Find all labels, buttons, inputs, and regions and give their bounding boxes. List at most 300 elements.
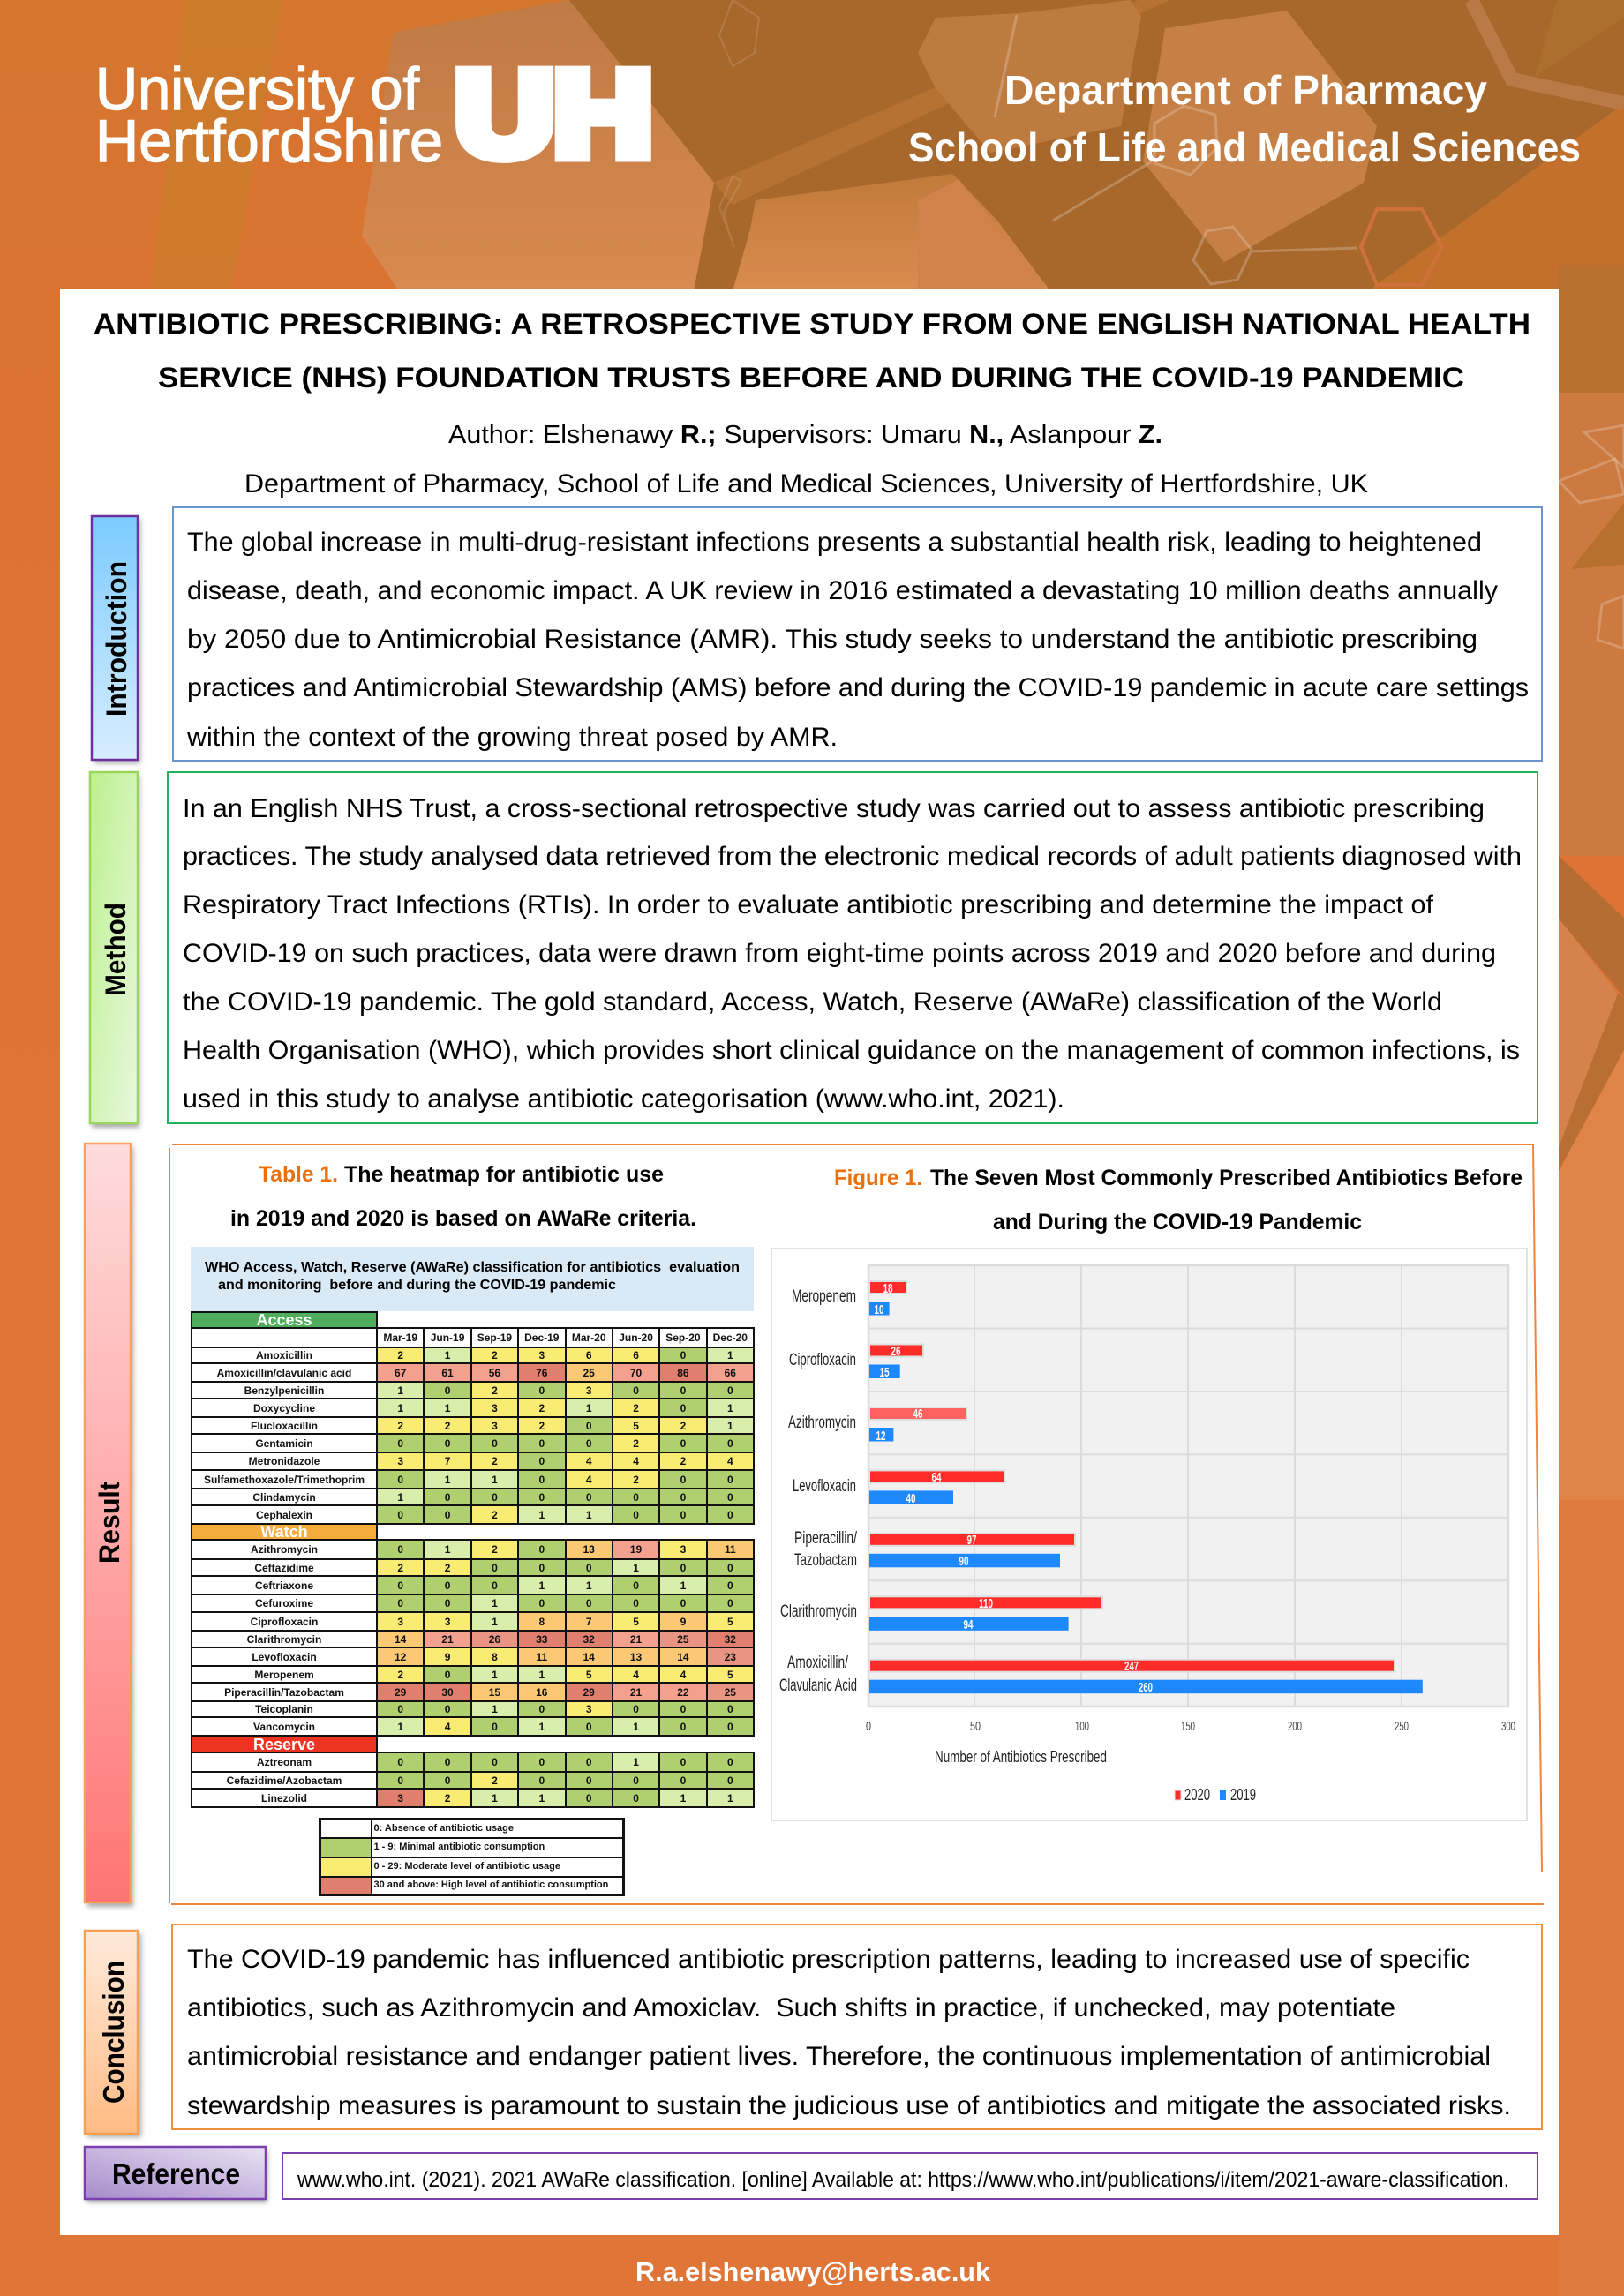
heatmap table: AWaRe antibiotic use: 13: [630, 1650, 642, 1662]
heatmap table: AWaRe antibiotic use: 1: [397, 1384, 403, 1396]
header: department and school: Department of Pharmacy: [1004, 67, 1487, 113]
heatmap table: AWaRe antibiotic use: 0: [445, 1509, 450, 1521]
heatmap legend: 0 - 29: Moderate level of antibiotic usage: [374, 1861, 560, 1872]
heatmap table: AWaRe antibiotic use: 0: [680, 1437, 686, 1449]
heatmap table: AWaRe antibiotic use: 0: [586, 1437, 592, 1449]
heatmap table: AWaRe antibiotic use: 1: [633, 1756, 639, 1768]
panel: conclusion text: stewardship measures is paramount to sustain the judicious use of antibiotics and mitigate the associated risks.: [187, 2091, 1511, 2120]
heatmap table: AWaRe antibiotic use: 0: [586, 1756, 592, 1768]
heatmap table: AWaRe antibiotic use: 0: [397, 1474, 403, 1486]
bar value labels: [874, 1281, 1153, 1695]
title: SERVICE (NHS) FOUNDATION TRUSTS BEFORE AND DURING THE COVID-19 PANDEMIC: [158, 362, 1464, 394]
heatmap table: AWaRe antibiotic use: 0: [492, 1491, 498, 1504]
heatmap table: AWaRe antibiotic use: Cephalexin: [256, 1509, 312, 1521]
section tab: Introduction: [92, 516, 140, 763]
heatmap table: AWaRe antibiotic use: 1: [492, 1791, 498, 1804]
category labels: Clarithromycin: [780, 1602, 857, 1621]
heatmap table: AWaRe antibiotic use: 3: [538, 1349, 545, 1362]
heatmap table: AWaRe antibiotic use: 0: [633, 1597, 639, 1609]
title: ANTIBIOTIC PRESCRIBING: A RETROSPECTIVE STUDY FROM ONE ENGLISH NATIONAL HEALTH: [94, 308, 1530, 340]
heatmap table: AWaRe antibiotic use: 1: [538, 1791, 545, 1804]
heatmap table: AWaRe antibiotic use: 4: [633, 1455, 639, 1467]
heatmap table: AWaRe antibiotic use: Flucloxacillin: [251, 1419, 318, 1431]
heatmap table: AWaRe antibiotic use: 2: [492, 1384, 498, 1396]
heatmap table: AWaRe antibiotic use: 8: [538, 1615, 545, 1627]
heatmap table: AWaRe antibiotic use: 9: [680, 1615, 686, 1627]
heatmap table: AWaRe antibiotic use: Jun-20: [619, 1332, 653, 1344]
heatmap table: AWaRe antibiotic use: 0: [445, 1774, 450, 1786]
heatmap table: AWaRe antibiotic use: 4: [586, 1474, 592, 1486]
panel: conclusion text: The COVID-19 pandemic has influenced antibiotic prescription patterns, leading to increased use of specific: [187, 1945, 1470, 1974]
heatmap table: AWaRe antibiotic use: 3: [397, 1455, 403, 1467]
heatmap table: AWaRe antibiotic use: 0: [538, 1437, 545, 1449]
legend: [1175, 1786, 1256, 1804]
panel: method text: [168, 772, 1538, 1123]
heatmap table: AWaRe antibiotic use: 32: [725, 1632, 736, 1645]
legend: 2020: [1184, 1786, 1210, 1804]
heatmap table: AWaRe antibiotic use: 2: [633, 1437, 639, 1449]
panel: introduction text: by 2050 due to Antimicrobial Resistance (AMR). This study seeks to understand the antibiotic prescribing: [187, 625, 1477, 654]
heatmap table: AWaRe antibiotic use: 0: [397, 1579, 403, 1592]
heatmap table: AWaRe antibiotic use: 0: [445, 1756, 450, 1768]
heatmap table: AWaRe antibiotic use: 70: [630, 1366, 642, 1378]
bar value labels: 64: [932, 1470, 942, 1485]
panel: conclusion text: antimicrobial resistance and endanger patient lives. Therefore, the continuous implementation of antimicrobial: [187, 2042, 1491, 2071]
panel: introduction text: practices and Antimicrobial Stewardship (AMS) before and during the COVID-19 pandemic in acute care settings: [187, 673, 1529, 702]
panel: conclusion text: antibiotics, such as Azithromycin and Amoxiclav. Such shifts in practice, if unchecked, may potentiate: [187, 1993, 1395, 2022]
heatmap table: AWaRe antibiotic use: 0: [586, 1491, 592, 1504]
heatmap table: AWaRe antibiotic use: 0: [445, 1597, 450, 1609]
heatmap table: AWaRe antibiotic use: 0: [633, 1791, 639, 1804]
heatmap table: AWaRe antibiotic use: 1: [727, 1401, 733, 1414]
heatmap table: AWaRe antibiotic use: 0: [680, 1349, 686, 1362]
heatmap table: AWaRe antibiotic use: Piperacillin/Tazobactam: [224, 1685, 344, 1698]
heatmap table: AWaRe antibiotic use: 1: [727, 1791, 733, 1804]
heatmap legend: 1 - 9: Minimal antibiotic consumption: [374, 1842, 545, 1852]
panel: conclusion text: [172, 1925, 1542, 2129]
legend: 2019: [1230, 1786, 1256, 1804]
heatmap table: AWaRe antibiotic use: 5: [633, 1615, 639, 1627]
heatmap table: AWaRe antibiotic use: 3: [445, 1615, 450, 1627]
bar value labels: 260: [1139, 1680, 1153, 1695]
logo: University of Hertfordshire: UH: [455, 48, 652, 180]
heatmap table: AWaRe antibiotic use: 7: [586, 1615, 592, 1627]
heatmap table: AWaRe antibiotic use: 9: [445, 1650, 450, 1662]
heatmap table: AWaRe antibiotic use: 0: [397, 1543, 403, 1556]
heatmap table: AWaRe antibiotic use: 3: [586, 1384, 592, 1396]
heatmap table: AWaRe antibiotic use: 0: [727, 1756, 733, 1768]
bar chart: seven most prescribed antibiotics: [771, 1249, 1527, 1820]
heatmap table: AWaRe antibiotic use: 1: [680, 1579, 686, 1592]
heatmap table: AWaRe antibiotic use: 2: [397, 1668, 403, 1680]
heatmap table: AWaRe antibiotic use: 0: [492, 1579, 498, 1592]
panel: reference text: [282, 2153, 1538, 2199]
heatmap table: AWaRe antibiotic use: 2: [680, 1455, 686, 1467]
heatmap table: AWaRe antibiotic use: 4: [445, 1721, 450, 1733]
axis title: Number of Antibiotics Prescribed: [935, 1748, 1107, 1766]
heatmap table: AWaRe antibiotic use: 0: [492, 1721, 498, 1733]
heatmap table: AWaRe antibiotic use: Teicoplanin: [255, 1703, 313, 1715]
bar value labels: 247: [1124, 1659, 1139, 1674]
heatmap table: AWaRe antibiotic use: 25: [677, 1632, 689, 1645]
heatmap table: AWaRe antibiotic use: 0: [492, 1437, 498, 1449]
heatmap table: AWaRe antibiotic use: 0: [397, 1509, 403, 1521]
section tab: Introduction: Introduction: [101, 561, 132, 717]
bar value labels: 97: [967, 1533, 976, 1548]
panel: introduction text: disease, death, and economic impact. A UK review in 2016 estimated a devastating 10 million deaths annually: [187, 576, 1498, 605]
heatmap table: AWaRe antibiotic use: 1: [492, 1474, 498, 1486]
heatmap table: AWaRe antibiotic use: 0: [397, 1774, 403, 1786]
heatmap table: AWaRe antibiotic use: Levofloxacin: [252, 1650, 317, 1662]
heatmap table: AWaRe antibiotic use: 5: [586, 1668, 592, 1680]
heatmap table: AWaRe antibiotic use: 0: [727, 1721, 733, 1733]
heatmap table: AWaRe antibiotic use: 0: [445, 1579, 450, 1592]
category labels: Ciprofloxacin: [789, 1351, 856, 1369]
heatmap table: AWaRe antibiotic use: Ceftazidime: [254, 1562, 314, 1574]
heatmap table: AWaRe antibiotic use: 0: [727, 1474, 733, 1486]
heatmap table: AWaRe antibiotic use: 23: [725, 1650, 736, 1662]
heatmap table: AWaRe antibiotic use: 14: [583, 1650, 595, 1662]
heatmap table: AWaRe antibiotic use: 5: [727, 1615, 733, 1627]
heatmap table: AWaRe antibiotic use: Clindamycin: [252, 1491, 316, 1504]
heatmap table: AWaRe antibiotic use: 22: [677, 1685, 689, 1698]
heatmap table: AWaRe antibiotic use: 14: [395, 1632, 406, 1645]
contact email: R.a.elshenawy@herts.ac.uk: [635, 2256, 991, 2287]
2020 bars: [869, 1281, 1395, 1672]
heatmap table: AWaRe antibiotic use: 0: [680, 1756, 686, 1768]
heatmap table: AWaRe antibiotic use: 0: [633, 1509, 639, 1521]
heatmap table: AWaRe antibiotic use: 67: [395, 1366, 406, 1378]
heatmap table: AWaRe antibiotic use: 1: [445, 1474, 450, 1486]
heatmap table: AWaRe antibiotic use: Azithromycin: [251, 1543, 318, 1556]
heatmap table: AWaRe antibiotic use: Metronidazole: [249, 1455, 320, 1467]
category labels: Levofloxacin: [793, 1477, 856, 1496]
panel: introduction text: within the context of the growing threat posed by AMR.: [186, 723, 838, 752]
category labels: Tazobactam: [794, 1551, 857, 1570]
panel: method text: Respiratory Tract Infections (RTIs). In order to evaluate antibiotic prescribing and determine the impact of: [183, 890, 1434, 919]
heatmap table: AWaRe antibiotic use: 0: [445, 1668, 450, 1680]
value axis ticks: 150: [1181, 1719, 1195, 1734]
heatmap table: AWaRe antibiotic use: 0: [397, 1597, 403, 1609]
heatmap table: AWaRe antibiotic use: 5: [727, 1668, 733, 1680]
table heading: Table 1.: [259, 1162, 338, 1187]
value axis ticks: 200: [1288, 1719, 1302, 1734]
heatmap table: AWaRe antibiotic use: 0: [538, 1384, 545, 1396]
heatmap legend: 0: Absence of antibiotic usage: [374, 1823, 514, 1834]
bar value labels: 110: [979, 1596, 993, 1611]
heatmap table: AWaRe antibiotic use: 5: [633, 1419, 639, 1431]
heatmap table: AWaRe antibiotic use: 32: [583, 1632, 595, 1645]
panel: result frame: [169, 1144, 1544, 1904]
figure heading: Figure 1.: [834, 1166, 922, 1190]
heatmap table: AWaRe antibiotic use: Ceftriaxone: [255, 1579, 313, 1592]
heatmap table: AWaRe antibiotic use: 2: [633, 1401, 639, 1414]
heatmap table: AWaRe antibiotic use: 2: [397, 1562, 403, 1574]
heatmap table: AWaRe antibiotic use: 0: [727, 1491, 733, 1504]
heatmap table: AWaRe antibiotic use: 3: [397, 1791, 403, 1804]
heatmap table: AWaRe antibiotic use: 0: [727, 1384, 733, 1396]
heatmap table: AWaRe antibiotic use: Mar-19: [383, 1332, 417, 1344]
heatmap table: AWaRe antibiotic use: 16: [536, 1685, 547, 1698]
heatmap table: AWaRe antibiotic use: 6: [586, 1349, 592, 1362]
heatmap table: AWaRe antibiotic use: Aztreonam: [257, 1756, 312, 1768]
heatmap table: AWaRe antibiotic use: Sulfamethoxazole/Trimethoprim: [204, 1474, 365, 1486]
heatmap table: AWaRe antibiotic use: 6: [633, 1349, 639, 1362]
heatmap table: AWaRe antibiotic use: 0: [586, 1562, 592, 1574]
panel: introduction text: [173, 507, 1542, 761]
heatmap table: AWaRe antibiotic use: Clarithromycin: [247, 1632, 321, 1645]
heatmap table: AWaRe antibiotic use: 0: [538, 1774, 545, 1786]
figure heading: [834, 1166, 1522, 1234]
heatmap table: AWaRe antibiotic use: 0: [680, 1509, 686, 1521]
heatmap table: AWaRe antibiotic use: 3: [680, 1543, 686, 1556]
bar value labels: 12: [876, 1429, 886, 1444]
heatmap table: AWaRe antibiotic use: 0: [586, 1774, 592, 1786]
heatmap table: AWaRe antibiotic use: 1: [586, 1509, 592, 1521]
heatmap table: AWaRe antibiotic use: 0: [680, 1474, 686, 1486]
section tab: Result: Result: [94, 1482, 125, 1564]
heatmap table: AWaRe antibiotic use: 1: [680, 1791, 686, 1804]
heatmap table: AWaRe antibiotic use: 1: [538, 1668, 545, 1680]
heatmap table: AWaRe antibiotic use: 1: [727, 1349, 733, 1362]
panel: method text: Health Organisation (WHO), which provides short clinical guidance on the management of common infections, is: [183, 1036, 1520, 1065]
heatmap table: AWaRe antibiotic use: 2: [538, 1401, 545, 1414]
value axis ticks: 0: [866, 1719, 871, 1734]
heatmap table: AWaRe antibiotic use: 0: [727, 1579, 733, 1592]
heatmap table: AWaRe antibiotic use: 4: [727, 1455, 733, 1467]
heatmap table: AWaRe antibiotic use: Sep-19: [477, 1332, 512, 1344]
heatmap table: AWaRe antibiotic use: 76: [536, 1366, 547, 1378]
heatmap table: AWaRe antibiotic use: 1: [538, 1509, 545, 1521]
table caption banner: [191, 1247, 754, 1311]
heatmap table: AWaRe antibiotic use: 2: [492, 1774, 498, 1786]
panel: method text: In an English NHS Trust, a cross-sectional retrospective study was carried out to assess antibiotic prescribing: [183, 794, 1485, 823]
heatmap table: AWaRe antibiotic use: Cefuroxime: [255, 1597, 313, 1609]
heatmap table: AWaRe antibiotic use: 2: [492, 1349, 498, 1362]
heatmap table: AWaRe antibiotic use: 0: [538, 1562, 545, 1574]
heatmap table: AWaRe antibiotic use: 1: [492, 1597, 498, 1609]
heatmap table: AWaRe antibiotic use: 2: [397, 1419, 403, 1431]
heatmap table: AWaRe antibiotic use: 0: [586, 1791, 592, 1804]
heatmap table: AWaRe antibiotic use: 0: [538, 1597, 545, 1609]
heatmap table: AWaRe antibiotic use: 4: [586, 1455, 592, 1467]
heatmap table: AWaRe antibiotic use: 0: [538, 1455, 545, 1467]
bar value labels: 46: [913, 1407, 923, 1422]
heatmap table: AWaRe antibiotic use: 19: [630, 1543, 642, 1556]
section tab: Result: [85, 1144, 133, 1907]
header: department and school: School of Life and Medical Sciences: [908, 124, 1581, 170]
heatmap legend: [319, 1818, 625, 1896]
figure heading: and During the COVID-19 Pandemic: [993, 1210, 1362, 1234]
heatmap table: AWaRe antibiotic use: 7: [445, 1455, 450, 1467]
heatmap table: AWaRe antibiotic use: 0: [633, 1703, 639, 1715]
heatmap table: AWaRe antibiotic use: 0: [586, 1597, 592, 1609]
heatmap table: AWaRe antibiotic use: 1: [492, 1668, 498, 1680]
logo: University of Hertfordshire: Hertfordshire: [95, 108, 443, 175]
header: department and school: [908, 67, 1581, 170]
heatmap table: AWaRe antibiotic use: 1: [586, 1401, 592, 1414]
bar value labels: 90: [959, 1554, 969, 1569]
panel: introduction text: The global increase in multi-drug-resistant infections presents a substantial health risk, leading to heightened: [187, 528, 1482, 557]
heatmap table: AWaRe antibiotic use: 0: [445, 1437, 450, 1449]
heatmap table: AWaRe antibiotic use: 0: [680, 1384, 686, 1396]
heatmap table: AWaRe antibiotic use: 21: [441, 1632, 454, 1645]
value axis ticks: [866, 1719, 1515, 1734]
heatmap table: AWaRe antibiotic use: 12: [395, 1650, 406, 1662]
heatmap table: AWaRe antibiotic use: 86: [677, 1366, 689, 1378]
category labels: Azithromycin: [788, 1414, 856, 1432]
heatmap table: AWaRe antibiotic use: 0: [633, 1384, 639, 1396]
bar value labels: 26: [891, 1344, 900, 1359]
heatmap table: AWaRe antibiotic use: 0: [445, 1384, 450, 1396]
heatmap table: AWaRe antibiotic use: 1: [538, 1579, 545, 1592]
heatmap table: AWaRe antibiotic use: Amoxicillin: [256, 1349, 312, 1362]
value axis ticks: 100: [1075, 1719, 1089, 1734]
heatmap table: AWaRe antibiotic use: 14: [677, 1650, 689, 1662]
heatmap table: AWaRe antibiotic use: 0: [680, 1774, 686, 1786]
heatmap table: AWaRe antibiotic use: 0: [538, 1474, 545, 1486]
heatmap table: AWaRe antibiotic use: 1: [492, 1703, 498, 1715]
heatmap table: AWaRe antibiotic use: Doxycycline: [253, 1401, 315, 1414]
logo: University of Hertfordshire: University of: [95, 56, 419, 123]
heatmap table: AWaRe antibiotic use: 0: [680, 1721, 686, 1733]
category labels: Piperacillin/: [794, 1529, 858, 1548]
heatmap table: AWaRe antibiotic use: 0: [633, 1491, 639, 1504]
heatmap table: AWaRe antibiotic use: 0: [680, 1491, 686, 1504]
heatmap table: AWaRe antibiotic use: 0: [727, 1509, 733, 1521]
logo: University of Hertfordshire: [95, 48, 652, 180]
table caption banner: WHO Access, Watch, Reserve (AWaRe) classification for antibiotics evaluation: [205, 1260, 740, 1275]
heatmap table: AWaRe antibiotic use: 1: [727, 1419, 733, 1431]
heatmap table: AWaRe antibiotic use: 1: [397, 1721, 403, 1733]
section tab: Conclusion: Conclusion: [97, 1961, 130, 2104]
heatmap table: AWaRe antibiotic use: 0: [397, 1437, 403, 1449]
heatmap table: AWaRe antibiotic use: 0: [727, 1774, 733, 1786]
affiliation: Department of Pharmacy, School of Life and Medical Sciences, University of Hertfordshire, UK: [244, 469, 1368, 499]
heatmap table: AWaRe antibiotic use: 0: [445, 1703, 450, 1715]
section tab: Method: Method: [100, 903, 132, 996]
heatmap table: AWaRe antibiotic use: 21: [630, 1685, 642, 1698]
heatmap table: AWaRe antibiotic use: 2: [492, 1509, 498, 1521]
heatmap table: AWaRe antibiotic use: 13: [583, 1543, 595, 1556]
heatmap table: AWaRe antibiotic use: 30: [441, 1685, 454, 1698]
panel: method text: used in this study to analyse antibiotic categorisation (www.who.int, 2021).: [183, 1084, 1064, 1114]
title: [94, 308, 1530, 394]
heatmap table: AWaRe antibiotic use: 1: [397, 1401, 403, 1414]
heatmap table: AWaRe antibiotic use: 11: [536, 1650, 547, 1662]
2019 bars: [869, 1302, 1423, 1693]
heatmap table: AWaRe antibiotic use: 0: [727, 1562, 733, 1574]
heatmap table: AWaRe antibiotic use: 66: [725, 1366, 736, 1378]
bar value labels: 15: [879, 1365, 890, 1380]
panel: method text: the COVID-19 pandemic. The gold standard, Access, Watch, Reserve (AWaRe) classification of the World: [183, 987, 1442, 1017]
heatmap table: AWaRe antibiotic use: 0: [538, 1543, 545, 1556]
heatmap table: AWaRe antibiotic use: 1: [492, 1615, 498, 1627]
heatmap table: AWaRe antibiotic use: 25: [583, 1366, 595, 1378]
panel: method text: COVID-19 on such practices, data were drawn from eight-time points across 2019 and 2020 before and during: [183, 939, 1496, 968]
heatmap table: AWaRe antibiotic use: 2: [445, 1562, 450, 1574]
heatmap table: AWaRe antibiotic use: 0: [492, 1562, 498, 1574]
table heading: The heatmap for antibiotic use: [344, 1162, 664, 1187]
heatmap table: AWaRe antibiotic use: 26: [489, 1632, 500, 1645]
heatmap table: AWaRe antibiotic use: 29: [583, 1685, 595, 1698]
heatmap table: AWaRe antibiotic use: 0: [727, 1437, 733, 1449]
section tab: Conclusion: [85, 1931, 141, 2137]
heatmap table: AWaRe antibiotic use: 0: [680, 1597, 686, 1609]
panel: reference text: www.who.int. (2021). 2021 AWaRe classification. [online] Available at: https://www.who.int/publications/i/item/2021-aware-classification.: [297, 2168, 1509, 2192]
table heading: [230, 1162, 696, 1231]
heatmap table: AWaRe antibiotic use: 0: [397, 1756, 403, 1768]
heatmap table: AWaRe antibiotic use: Vancomycin: [253, 1721, 315, 1733]
heatmap table: AWaRe antibiotic use: 1: [538, 1721, 545, 1733]
category labels: Amoxicillin/: [787, 1654, 849, 1672]
section tab: Reference: [85, 2147, 267, 2202]
heatmap table: AWaRe antibiotic use: 3: [492, 1401, 498, 1414]
heatmap table: AWaRe antibiotic use: Dec-20: [713, 1332, 748, 1344]
value axis ticks: 250: [1395, 1719, 1409, 1734]
heatmap table: AWaRe antibiotic use: 2: [680, 1419, 686, 1431]
figure heading: The Seven Most Commonly Prescribed Antibiotics Before: [930, 1166, 1522, 1190]
heatmap table: AWaRe antibiotic use: 33: [536, 1632, 547, 1645]
heatmap table: AWaRe antibiotic use: Gentamicin: [255, 1437, 313, 1449]
bar value labels: 40: [906, 1491, 916, 1506]
heatmap table: AWaRe antibiotic use: 2: [445, 1419, 450, 1431]
category labels: [779, 1287, 858, 1695]
heatmap table: AWaRe antibiotic use: 0: [538, 1491, 545, 1504]
heatmap table: AWaRe antibiotic use: 1: [633, 1721, 639, 1733]
heatmap table: AWaRe antibiotic use: 2: [492, 1543, 498, 1556]
heatmap table: AWaRe antibiotic use: 2: [538, 1419, 545, 1431]
heatmap table: AWaRe antibiotic use: 0: [586, 1419, 592, 1431]
heatmap table: AWaRe antibiotic use: [191, 1311, 755, 1808]
category labels: Clavulanic Acid: [779, 1677, 857, 1695]
heatmap table: AWaRe antibiotic use: 2: [397, 1349, 403, 1362]
heatmap table: AWaRe antibiotic use: Jun-19: [431, 1332, 464, 1344]
heatmap table: AWaRe antibiotic use: 56: [489, 1366, 500, 1378]
heatmap table: AWaRe antibiotic use: 1: [445, 1401, 450, 1414]
value axis ticks: 300: [1501, 1719, 1515, 1734]
heatmap table: AWaRe antibiotic use: 0: [445, 1491, 450, 1504]
heatmap table: AWaRe antibiotic use: 0: [727, 1703, 733, 1715]
heatmap table: AWaRe antibiotic use: 0: [680, 1401, 686, 1414]
heatmap table: AWaRe antibiotic use: 0: [727, 1597, 733, 1609]
heatmap table: AWaRe antibiotic use: 25: [725, 1685, 736, 1698]
heatmap table: AWaRe antibiotic use: 4: [633, 1668, 639, 1680]
authors: Author: Elshenawy R.; Supervisors: Umaru N., Aslanpour Z.: [448, 421, 1162, 449]
value axis ticks: 50: [970, 1719, 981, 1734]
bar value labels: 94: [964, 1617, 974, 1632]
heatmap table: AWaRe antibiotic use: Cefazidime/Azobactam: [227, 1774, 342, 1786]
heatmap table: AWaRe antibiotic use: 3: [397, 1615, 403, 1627]
heatmap table: AWaRe antibiotic use: 8: [492, 1650, 498, 1662]
heatmap table: AWaRe antibiotic use: 0: [680, 1562, 686, 1574]
heatmap table: AWaRe antibiotic use: 3: [586, 1703, 592, 1715]
heatmap table: AWaRe antibiotic use: 0: [586, 1721, 592, 1733]
heatmap table: AWaRe antibiotic use: Linezolid: [261, 1791, 307, 1804]
category labels: Meropenem: [792, 1287, 856, 1306]
table caption banner: and monitoring before and during the COVID-19 pandemic: [218, 1278, 616, 1293]
heatmap table: AWaRe antibiotic use: 0: [680, 1703, 686, 1715]
heatmap table: AWaRe antibiotic use: 2: [445, 1791, 450, 1804]
white content panel: [60, 289, 1559, 2235]
heatmap table: AWaRe antibiotic use: 61: [441, 1366, 454, 1378]
bar value labels: 10: [874, 1302, 884, 1317]
heatmap table: AWaRe antibiotic use: 2: [633, 1474, 639, 1486]
heatmap table: AWaRe antibiotic use: Amoxicillin/clavulanic acid: [217, 1366, 351, 1378]
heatmap table: AWaRe antibiotic use: Sep-20: [665, 1332, 701, 1344]
heatmap table: AWaRe antibiotic use: 15: [489, 1685, 500, 1698]
table heading: in 2019 and 2020 is based on AWaRe criteria.: [230, 1206, 696, 1231]
